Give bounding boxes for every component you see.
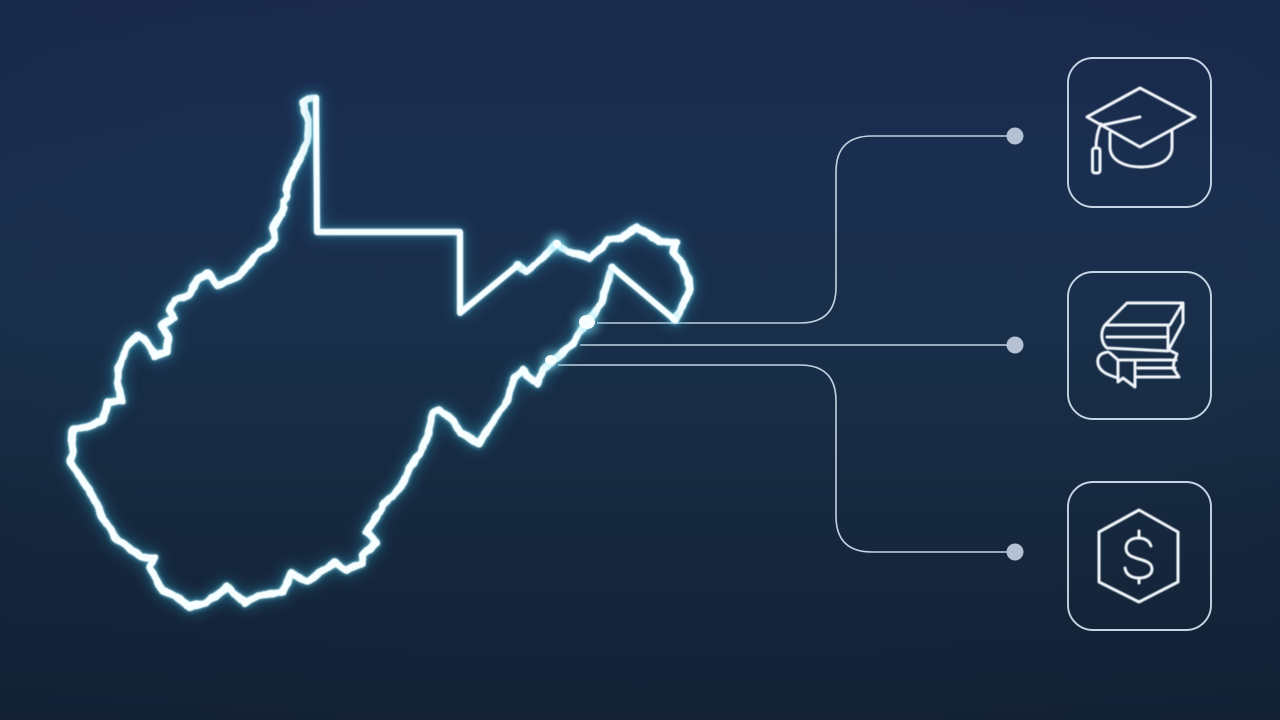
- panel: books icon: [1068, 272, 1211, 419]
- panel: finance icon: [1068, 482, 1211, 630]
- outline: irregular river borders: [70, 98, 690, 607]
- connector: graduation cap: [597, 136, 1015, 323]
- connector end dots: [1006, 128, 1024, 560]
- dot: finance: [1006, 544, 1024, 560]
- glowing West Virginia outline: [70, 98, 690, 607]
- icon: stack of books: [1098, 303, 1183, 387]
- bright highlights along the outline: [542, 236, 598, 369]
- connector: books: [580, 344, 1015, 346]
- icon: hexagon with dollar sign: [1099, 510, 1178, 602]
- connector: finance: [558, 365, 1015, 552]
- icon: graduation cap: [1087, 88, 1195, 173]
- connector lines: [558, 136, 1015, 552]
- dot: books: [1006, 336, 1024, 354]
- outline: straight state borders: [316, 98, 675, 320]
- dot: graduation cap: [1006, 128, 1024, 144]
- panel: graduation icon: [1068, 58, 1211, 207]
